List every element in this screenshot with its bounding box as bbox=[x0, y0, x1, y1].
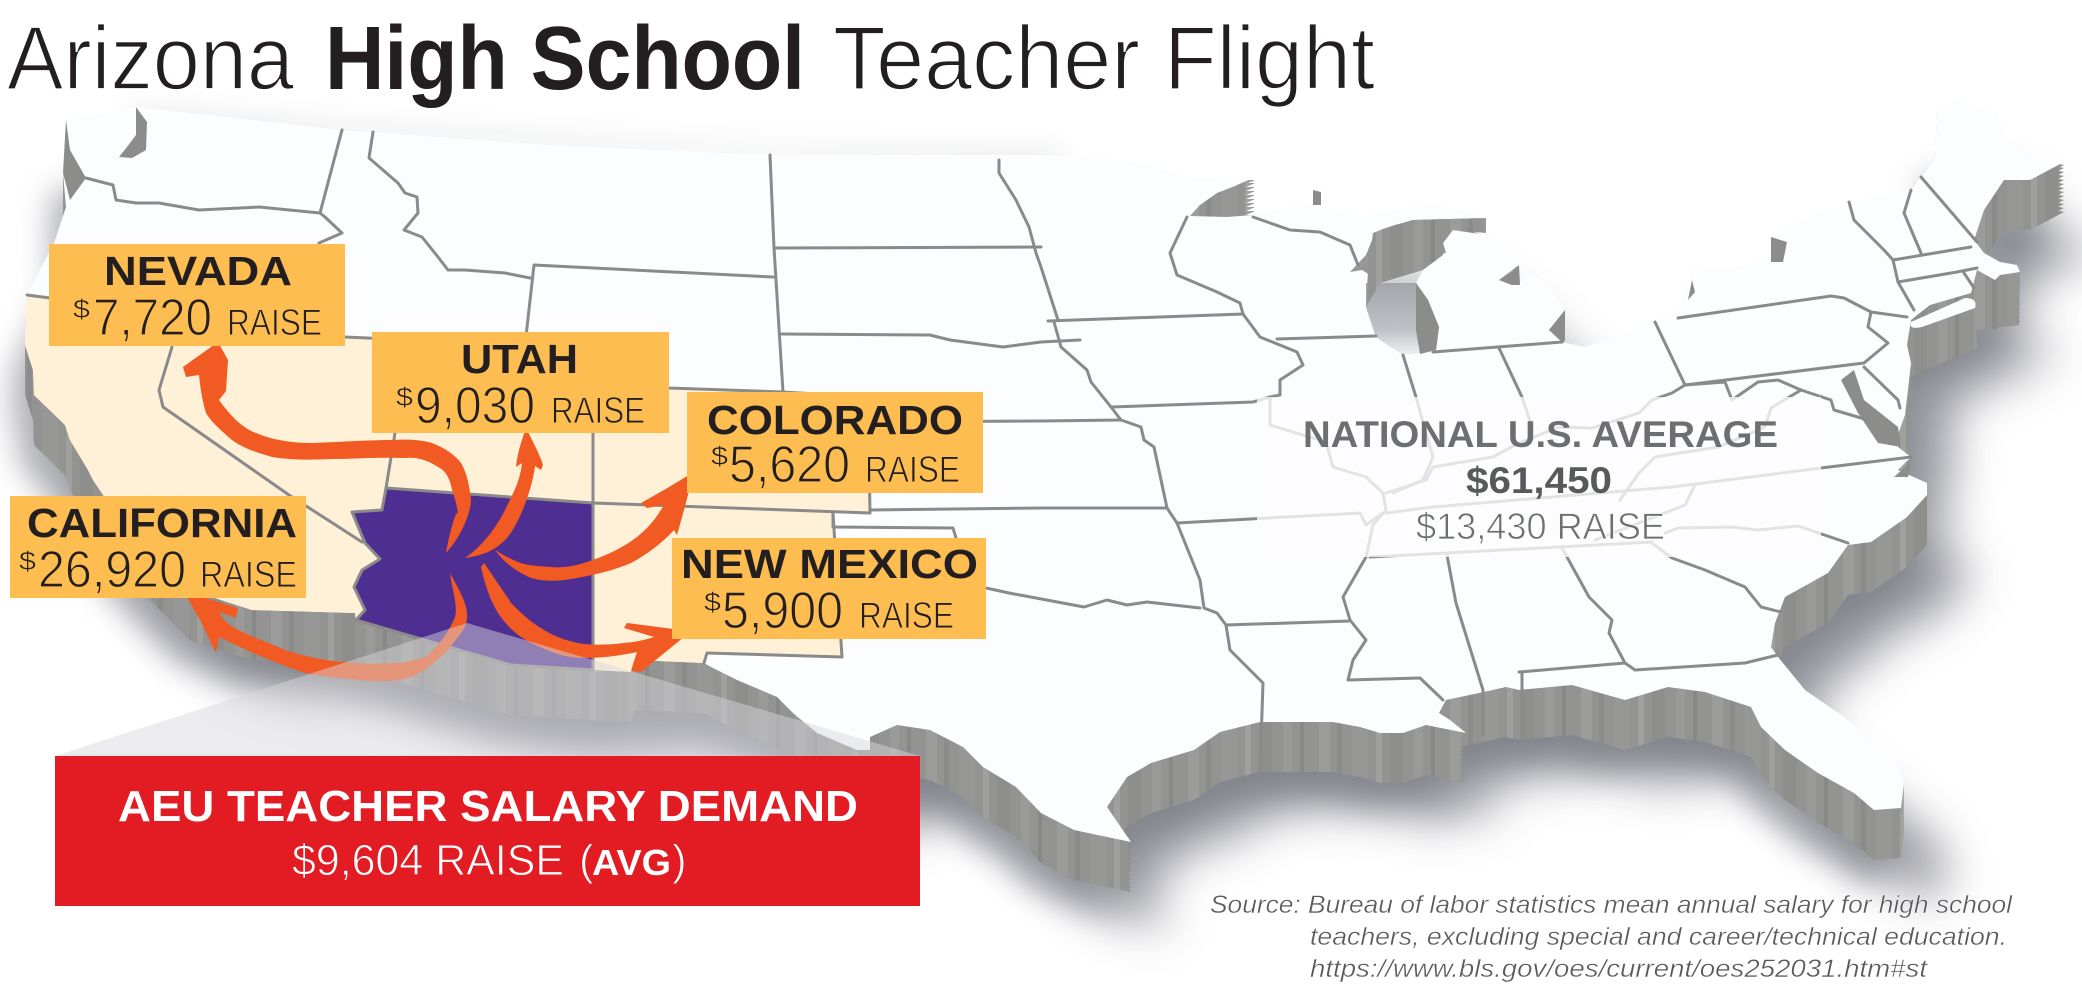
New Mexico dollar sign: $ bbox=[704, 587, 722, 617]
panel: New Mexico bbox=[672, 538, 986, 640]
demand open paren: ( bbox=[579, 836, 594, 885]
title bold part: High School bbox=[325, 9, 805, 109]
Colorado dollar sign: $ bbox=[711, 441, 729, 471]
national heading: NATIONAL U.S. AVERAGE bbox=[1303, 414, 1778, 455]
California amount: 26,920 bbox=[38, 541, 186, 599]
source line 2: teachers, excluding special and career/technical education. bbox=[1310, 923, 2007, 951]
New Mexico name: NEW MEXICO bbox=[681, 541, 978, 587]
Colorado name: COLORADO bbox=[707, 397, 963, 443]
Lake Michigan north shore side bbox=[1366, 218, 1486, 307]
Utah amount: 9,030 bbox=[415, 377, 535, 435]
national salary: $61,450 bbox=[1466, 460, 1612, 501]
demand average: AVG bbox=[592, 842, 671, 883]
Nevada box bbox=[49, 244, 345, 346]
highlighted states in cream bbox=[25, 295, 870, 672]
Colorado raise: RAISE bbox=[865, 449, 960, 490]
California name: CALIFORNIA bbox=[27, 500, 297, 546]
Colorado box bbox=[687, 392, 983, 493]
arrow to New Mexico bbox=[481, 563, 684, 672]
coast detail side faces bbox=[63, 107, 1911, 477]
title end part: Teacher Flight bbox=[833, 9, 1375, 109]
panel: national average bbox=[1257, 397, 1821, 557]
panel: Nevada bbox=[49, 244, 345, 347]
arrow to Nevada bbox=[183, 342, 471, 553]
Utah dollar sign: $ bbox=[396, 382, 414, 412]
national raise: $13,430 RAISE bbox=[1416, 506, 1665, 547]
panel: Colorado bbox=[687, 392, 983, 494]
source note bbox=[1210, 891, 2014, 983]
panel: California bbox=[10, 496, 306, 599]
state borders bbox=[27, 130, 1977, 772]
Utah name: UTAH bbox=[461, 336, 578, 382]
arrows from Arizona bbox=[183, 342, 694, 681]
Arizona bbox=[352, 488, 593, 670]
national average translucent backing bbox=[1257, 397, 1821, 557]
callout wedge from Arizona to salary demand bbox=[55, 623, 920, 756]
Utah raise: RAISE bbox=[551, 390, 645, 431]
Utah box bbox=[372, 332, 669, 433]
source line 1: Source: Bureau of labor statistics mean annual salary for high school bbox=[1210, 891, 2014, 919]
title: Arizona bbox=[7, 9, 295, 109]
Lake Michigan shaded water bbox=[1366, 283, 1439, 355]
Nevada raise: RAISE bbox=[227, 302, 322, 343]
arrow to Utah bbox=[465, 428, 543, 558]
Nevada dollar sign: $ bbox=[73, 294, 91, 324]
Colorado amount: 5,620 bbox=[729, 436, 850, 494]
Nevada amount: 7,720 bbox=[93, 289, 212, 347]
California raise: RAISE bbox=[200, 554, 297, 595]
panel: Utah bbox=[372, 332, 669, 435]
extruded map side bbox=[25, 103, 2064, 892]
New Mexico raise: RAISE bbox=[859, 595, 954, 636]
Long Island bbox=[1910, 298, 1976, 328]
New Mexico box bbox=[672, 538, 986, 639]
demand raise: $9,604 RAISE bbox=[292, 836, 564, 885]
Nevada name: NEVADA bbox=[104, 248, 292, 294]
panel: AEU salary demand bbox=[55, 756, 920, 906]
California box bbox=[10, 496, 306, 598]
demand heading: AEU TEACHER SALARY DEMAND bbox=[118, 782, 858, 831]
New Mexico amount: 5,900 bbox=[722, 582, 843, 640]
New England side faces bbox=[1908, 270, 2020, 378]
California dollar sign: $ bbox=[19, 546, 37, 576]
arrow to Colorado bbox=[495, 472, 694, 581]
demand close paren: ) bbox=[672, 836, 687, 885]
map top surface bbox=[25, 100, 2064, 842]
arrow to California bbox=[185, 573, 467, 681]
source line 3: https://www.bls.gov/oes/current/oes252031.htm#st bbox=[1310, 955, 1928, 983]
red callout box bbox=[55, 756, 920, 906]
